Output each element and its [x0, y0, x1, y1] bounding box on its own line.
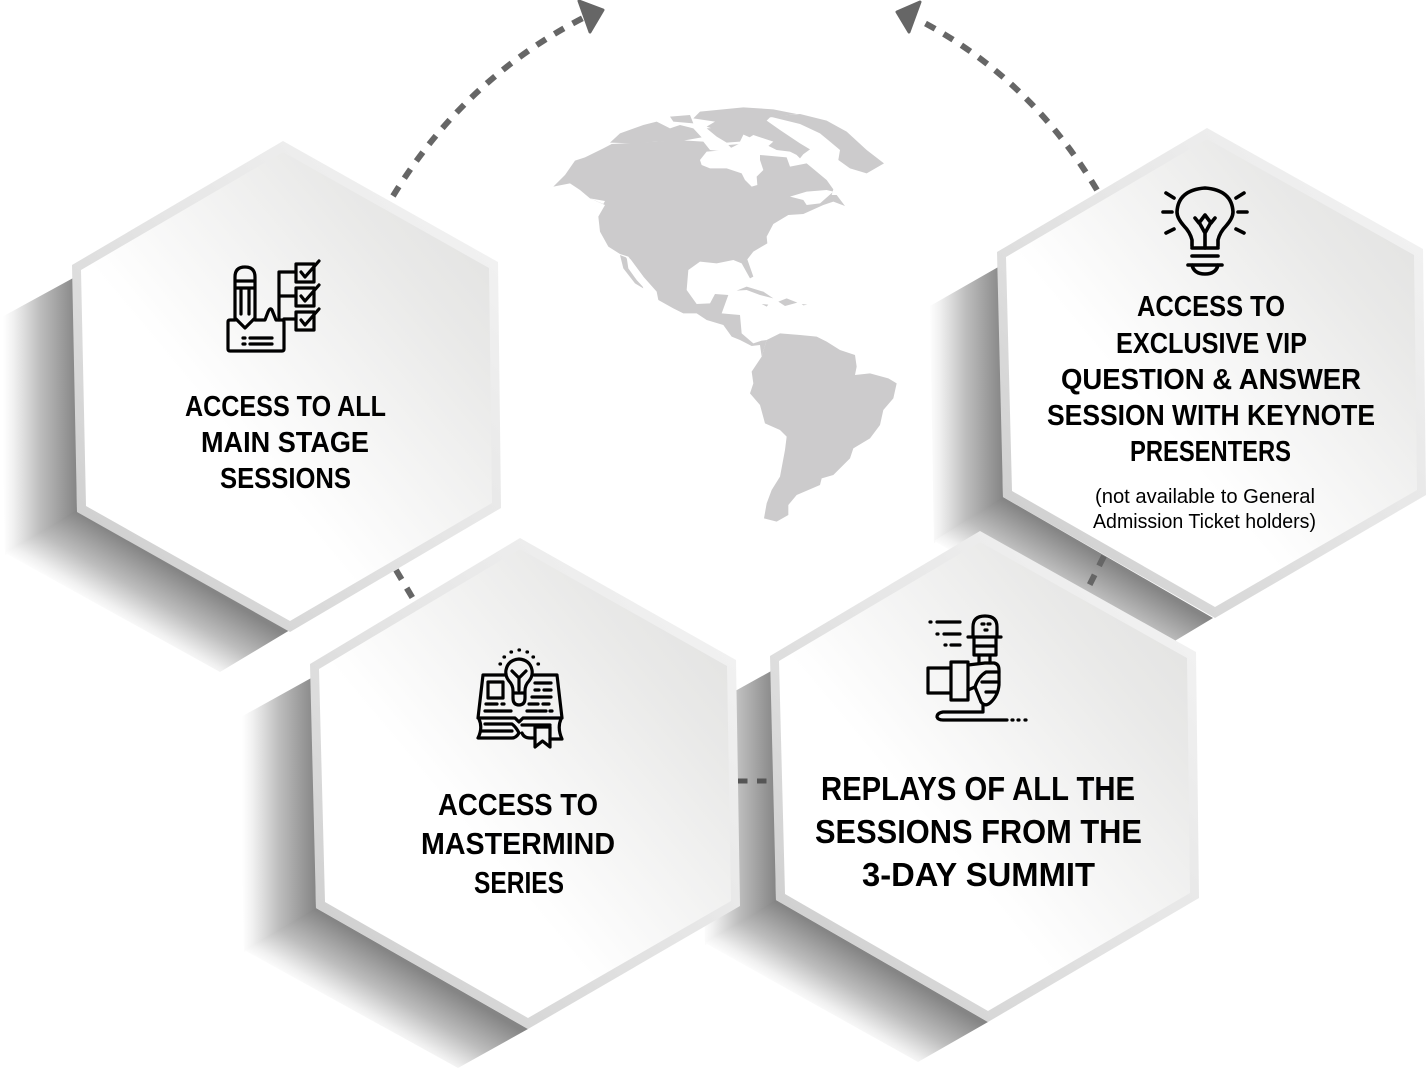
- shadow: hexagon 2: [239, 677, 528, 1068]
- heading: QUESTION & ANSWER: [1061, 364, 1361, 396]
- panel: main stage sessions: [72, 141, 501, 632]
- heading: ACCESS TO: [1137, 291, 1285, 323]
- heading: SERIES: [474, 865, 564, 900]
- heading: ACCESS TO: [438, 787, 598, 822]
- shadow: hexagon 3: [701, 670, 988, 1062]
- heading: [185, 391, 386, 495]
- arctic islands: [610, 107, 810, 158]
- dashed arrow: upper right: [897, 2, 1097, 190]
- icon: microphone in hand: [928, 616, 1026, 720]
- heading: PRESENTERS: [1130, 436, 1291, 468]
- map water details west: [590, 198, 644, 288]
- world map: [553, 107, 897, 522]
- map water details: [700, 135, 863, 211]
- heading: [421, 787, 615, 900]
- dashed connector: lower centre: [738, 778, 768, 784]
- north america: [553, 140, 845, 357]
- heading: 3-DAY SUMMIT: [862, 856, 1095, 893]
- heading: [1047, 291, 1375, 468]
- note text: Admission Ticket holders): [1093, 511, 1316, 533]
- dashed arrow: upper left: [393, 1, 603, 196]
- note text: (not available to General: [1095, 486, 1315, 508]
- heading: SESSIONS: [220, 463, 351, 495]
- icon: open book with bulb: [478, 650, 562, 747]
- panel: replays: [770, 531, 1199, 1022]
- dashed connector: lower right: [1086, 556, 1104, 592]
- heading: ACCESS TO ALL: [185, 391, 386, 423]
- panel: exclusive VIP Q&A: [997, 128, 1426, 618]
- heading: SESSIONS FROM THE: [815, 813, 1142, 850]
- heading: EXCLUSIVE VIP: [1116, 328, 1307, 360]
- heading: MASTERMIND: [421, 826, 615, 861]
- heading: MAIN STAGE: [201, 427, 369, 459]
- caribbean islands: [737, 287, 807, 307]
- heading: SESSION WITH KEYNOTE: [1047, 400, 1375, 432]
- icon: light bulb with rays: [1163, 188, 1247, 274]
- heading: [815, 770, 1142, 893]
- panel: mastermind series: [310, 538, 740, 1029]
- greenland: [770, 114, 884, 173]
- dashed connector: lower left: [396, 570, 415, 602]
- heading: REPLAYS OF ALL THE: [821, 770, 1135, 807]
- shadow: hexagon 4: [930, 266, 1213, 660]
- south america: [750, 333, 897, 522]
- shadow: hexagon 1: [0, 277, 290, 672]
- note text: [1093, 486, 1316, 533]
- icon: pencil and checklist: [228, 261, 319, 351]
